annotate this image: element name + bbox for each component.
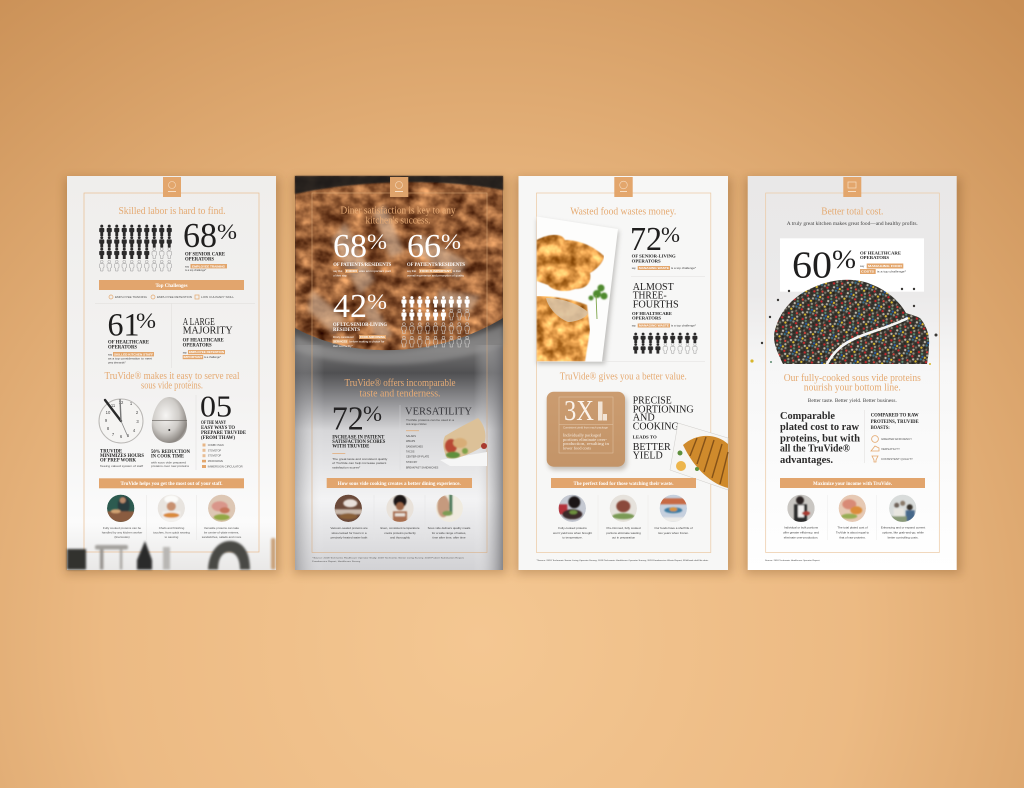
photo: kitchen utensils: [67, 538, 276, 570]
text: patient satisfaction: of TruVide can help increase patient: [332, 461, 387, 465]
photo: sealed packages: [659, 495, 687, 522]
list: preparation methods: STOVETOP: [208, 449, 222, 452]
photo: wrap on plate: [440, 418, 487, 466]
challenge list: EMPLOYEE TRAINING: [115, 295, 147, 299]
text: senior-living operators: [632, 254, 696, 270]
heading: taste and tenderness: [344, 377, 456, 400]
heading: taste and tenderness: taste and tenderness.: [360, 388, 441, 400]
photo: prepping protein: [107, 495, 135, 522]
package: 3x box: [547, 392, 627, 470]
stat: 05 easy ways: 05: [200, 389, 232, 424]
text: patients residents left: [333, 263, 392, 277]
photo: diner eating: [386, 495, 414, 522]
text: managing food costs: MANAGING FOOD: [868, 264, 902, 268]
package: 3x box: 3X: [564, 395, 594, 427]
text: senior care operators: OF SENIOR CARE: [185, 252, 225, 258]
text: staff benefits: Fully cooked proteins can be: [103, 526, 141, 530]
text: patient satisfaction: The great taste and consistent quality: [332, 457, 388, 461]
photo: diner with salad: [436, 494, 463, 522]
photo: sous vide bath: [334, 495, 362, 522]
text: minimizes prep work: TRUVIDE: [100, 450, 122, 455]
icon: clock: 9: [105, 418, 108, 423]
statement: comparable plated cost: Comparable: [780, 410, 835, 422]
text: dining benefits: Sous vide delivers quality meals: [428, 526, 471, 530]
stat: 68 percent: %: [217, 219, 237, 244]
photo: chef plating: [158, 495, 185, 522]
text: minimizes prep work: [100, 450, 144, 468]
photo: chef portioning: [787, 495, 815, 522]
block: versatility: TruVide proteins can be used in a: [406, 418, 455, 422]
stat: 05 easy ways: EASY WAYS TO: [201, 426, 235, 431]
callout: white stat box: [780, 238, 924, 292]
statement: comparable plated cost: [780, 410, 860, 466]
text: senior care operators: OPERATORS: [185, 258, 214, 262]
text: managing food costs: say: [860, 265, 865, 268]
heading: wasted food: Wasted food wastes money.: [570, 206, 676, 217]
stat: a large majority: say: [183, 352, 187, 354]
banner: better dining experience: [327, 478, 472, 488]
text: staff benefits: Chefs and finishing: [159, 526, 185, 530]
pictogram: 42 percent: [400, 296, 471, 348]
package: 3x box: Consistent yield from each package: [563, 426, 609, 430]
panel: better total cost: [745, 176, 961, 574]
package: 3x box: portions eliminate over-: [563, 437, 608, 442]
text: minimizes prep work: freeing valued system of staff: [100, 464, 143, 468]
package: 3x box: lower food costs: [563, 445, 591, 450]
stat: precise portioning: PRECISE: [633, 394, 672, 406]
text: staff benefits: touches, from quick searing: [153, 530, 190, 534]
text: senior care operators: say: [185, 265, 190, 268]
text: managing food costs: is a top challenge*: [877, 270, 906, 274]
text: patient satisfaction: WITH TRUVIDE: [332, 444, 369, 450]
icon: badge tab: [843, 177, 861, 197]
stat: 42 percent: [333, 288, 387, 325]
statement: comparable plated cost: advantages.: [780, 454, 833, 466]
text: minimizes prep work: MINIMIZES HOURS: [100, 454, 144, 459]
banner: get the most out of staff: TruVide helps you get the most out of your staff.: [120, 482, 223, 487]
text: patients residents left: OF PATIENTS/RESIDENTS: [333, 263, 392, 268]
list: advantages with icons: [871, 436, 913, 462]
challenge list: LOW CULINARY SKILL: [201, 295, 235, 299]
text: income benefits: offer greater efficiency, and: [783, 530, 819, 534]
footnote: [312, 556, 465, 563]
text: patients residents right: overall experience and perception of quality: [407, 273, 465, 277]
text: patient satisfaction: INCREASE IN PATIENT: [332, 435, 385, 440]
block: versatility: SANDWICHES: [406, 445, 423, 448]
statement: comparable plated cost: plated cost to raw: [780, 421, 859, 433]
stat: 60 percent: [792, 244, 856, 286]
stat: precise portioning: [633, 394, 694, 462]
text: healthcare operators 61: SKILLED KITCHEN STAFF: [114, 352, 153, 356]
photo: team in meeting: [889, 495, 916, 522]
text: waste benefits: won't yield loss when brought: [553, 531, 592, 535]
challenge list: [109, 295, 235, 299]
heading: nourish your bottom line: nourish your bottom line.: [804, 382, 901, 394]
text: patients residents left: of their stay: [333, 273, 347, 277]
text: healthcare operators 61: prep demands*: [108, 360, 126, 364]
text: LTC senior-living residents: [332, 323, 387, 348]
text: dining benefits: slow-cooked for hours in a: [331, 531, 367, 535]
icon: clock: 3: [136, 419, 139, 424]
stat: precise portioning: PORTIONING: [633, 403, 694, 415]
stat: 68 percent: 68: [183, 216, 217, 255]
heading: diner satisfaction: [340, 204, 456, 226]
text: healthcare operators: is a top challenge*: [671, 324, 696, 328]
footnote: *Source: 2018 Technomic Senior Living Operator Survey; 2018 Technomic Healthcare Operator Survey; 2018 Foodservice Waste Report; FDA food shelf life data.: [536, 559, 709, 562]
photo: diner at table: [558, 495, 586, 522]
list: advantages with icons: CONSISTENT QUALITY: [881, 458, 913, 461]
text: compared to raw proteins: COMPARED TO RAW: [871, 414, 919, 419]
banner: watching waste: [551, 478, 696, 488]
banner: get the most out of staff: [99, 478, 244, 488]
text: compared to raw proteins: [871, 414, 919, 431]
text: dining benefits: for a wide range of tastes,: [432, 531, 466, 535]
text: senior care operators: [185, 252, 227, 272]
list: advantages with icons: GREATER EFFICIENCY: [881, 438, 912, 441]
text: patients residents left: was an important part: [359, 269, 391, 273]
text: healthcare operators: OPERATORS: [632, 315, 661, 320]
text: healthcare operators 61: as a top consideration to meet: [108, 356, 152, 360]
stat: 68 percent: [183, 216, 237, 255]
text: LTC senior-living residents: SERVICES: [333, 340, 348, 344]
banner: maximize income: [780, 478, 925, 488]
text: LTC senior-living residents: Firmly considered: [333, 335, 354, 339]
stat: a large majority: EMPLOYEE RETENTION: [189, 351, 224, 354]
list: advantages with icons: VERSATILITY: [881, 448, 900, 451]
stat: 61 percent: 61: [108, 308, 140, 344]
panel: wasted food: [516, 176, 732, 574]
text: cook time reduction: proteins over raw proteins: [151, 464, 190, 468]
heading: diner satisfaction: Diner satisfaction is key to any: [340, 204, 456, 216]
list: preparation methods: COMBI OVEN: [208, 444, 224, 447]
text: LTC senior-living residents: their next facility*: [333, 344, 353, 348]
icon: badge tab: [390, 177, 408, 197]
footnote: Source: 2018 Technomic Healthcare Operator Report.: [765, 559, 821, 562]
text: dining benefits: cooks proteins perfectly: [384, 531, 416, 535]
text: LTC senior-living residents: before making a choice for: [350, 340, 385, 344]
stat: a large majority: A LARGE: [183, 317, 215, 328]
stat: almost three-fourths: FOURTHS: [633, 298, 679, 310]
text: healthcare operators 61: [108, 340, 154, 364]
pictogram: three-fourths: [632, 332, 699, 354]
text: staff benefits: [102, 526, 242, 539]
text: income benefits: Enhancing and or expand current: [881, 526, 925, 530]
text: income benefits: TruVide is about equal to: [836, 530, 869, 534]
text: managing food costs: OF HEALTHCARE: [860, 250, 901, 256]
text: patient satisfaction: SATISFACTION SCORES: [332, 440, 386, 445]
text: waste benefits: to temperature.: [562, 536, 583, 540]
photo: versatile proteins: [208, 495, 235, 522]
stat: a large majority: is a challenge*: [204, 355, 221, 359]
icon: badge tab: [614, 177, 633, 197]
text: senior-living operators: say: [632, 267, 636, 270]
stat: 68 percent of patients: 68: [333, 228, 367, 265]
subheading: A truly great kitchen makes great food—and healthy profits.: [787, 222, 918, 227]
stat: almost three-fourths: [633, 281, 679, 310]
text: patients residents right: OF PATIENTS/RESIDENTS: [407, 263, 465, 268]
text: patients residents left: FOOD: [346, 270, 357, 273]
text: waste benefits: two years when frozen.: [658, 531, 689, 535]
photo: food spread: [839, 495, 866, 522]
stat: 05 easy ways: PREPARE TRUVIDE: [201, 431, 247, 436]
block: versatility: SALADS: [406, 435, 416, 438]
banner: top challenges: [99, 280, 244, 290]
list: preparation methods: MICROWAVE: [208, 460, 223, 463]
statement: comparable plated cost: proteins, but with: [780, 432, 860, 444]
stat: 05 easy ways: (FROM THAW): [201, 436, 235, 441]
stat: 68 percent of patients: [333, 228, 387, 265]
text: dining benefits: precisely heated water bath: [331, 536, 368, 540]
heading: better value: TruVide® gives you a better value.: [560, 370, 687, 382]
panel: diner satisfaction: [293, 176, 507, 574]
text: managing food costs: [860, 250, 906, 274]
heading: truvide makes it easy: TruVide® makes it easy to serve real: [104, 370, 240, 382]
icon: badge tab: [163, 177, 181, 197]
stat: a large majority: IMPORTANT: [184, 356, 203, 359]
stat: 72 percent increase: 72: [332, 400, 364, 437]
text: managing food costs: OPERATORS: [860, 255, 889, 260]
banner: better dining experience: How sous vide cooking creates a better dining experience.: [338, 482, 462, 487]
stat: almost three-fourths: THREE-: [633, 290, 667, 302]
stat: precise portioning: YIELD: [633, 450, 663, 462]
text: LTC senior-living residents: OF LTC/SENIOR-LIVING: [333, 323, 387, 328]
footnote: *Source: 2018 Technomic Healthcare Operator Study; 2018 Technomic Senior Living Survey; 2018 Patient Satisfaction Report.: [312, 556, 465, 560]
text: income benefits: that of raw proteins.: [839, 536, 866, 540]
text: patients residents right: FOOD IS IMPORTANT: [420, 270, 452, 273]
illustration: crowd forming cracked coffee-bean shape: [750, 272, 938, 366]
text: patient satisfaction: satisfaction scores*: [332, 465, 361, 469]
panel: skilled labor: [65, 176, 280, 574]
stat: 61 percent: %: [136, 308, 156, 333]
block: versatility: wide range of dishes:: [406, 422, 427, 426]
stat: 72 percent senior living: 72: [630, 221, 662, 258]
text: waste benefits: [553, 526, 693, 540]
stat: almost three-fourths: ALMOST: [633, 281, 674, 293]
stat: a large majority: OPERATORS: [183, 344, 212, 349]
stat: 66 percent of patients: 66: [407, 228, 441, 265]
heading: skilled labor: Skilled labor is hard to find.: [118, 206, 226, 217]
icon: clock: 12: [119, 400, 124, 405]
text: waste benefits: Pre-trimmed, fully cooked: [606, 526, 641, 530]
photo: plated chicken: [537, 216, 619, 364]
subheading: Better taste. Better yield. Better business.: [808, 399, 897, 404]
stat: 72 percent increase: [332, 400, 382, 437]
stat: 66 percent of patients: %: [441, 229, 461, 254]
text: minimizes prep work: OF PREP WORK: [100, 459, 136, 464]
stat: 42 percent: %: [367, 289, 387, 314]
icon: clock: 5: [127, 433, 130, 438]
text: healthcare operators 61: OF HEALTHCARE: [108, 340, 149, 346]
photo: plated protein: [610, 495, 637, 522]
package: 3x box: Individually packaged: [563, 433, 602, 438]
text: cook time reduction: [151, 450, 191, 468]
text: income benefits: The total plated cost of: [837, 526, 868, 530]
icon: clock: 1: [130, 401, 133, 406]
icon: clock: 2: [136, 410, 139, 415]
package: 3x box: production, resulting in: [563, 441, 610, 447]
text: dining benefits: [330, 526, 471, 540]
text: patients residents left: say that: [333, 269, 343, 273]
challenge list: EMPLOYEE RETENTION: [157, 295, 192, 299]
stat: 66 percent of patients: [407, 228, 461, 265]
text: staff benefits: be center-of-plate entrees,: [204, 530, 239, 534]
stat: precise portioning: COOKING: [633, 420, 679, 432]
text: staff benefits: Versatile proteins can take: [204, 526, 239, 530]
text: waste benefits: Fully-cooked proteins: [558, 526, 587, 530]
stat: precise portioning: BETTER: [633, 441, 671, 453]
icon: clock: 6: [120, 434, 123, 439]
stat: 60 percent: 60: [792, 244, 832, 286]
text: dining benefits: and thoroughly: [390, 536, 410, 540]
text: LTC senior-living residents: FOOD AND DINING: [360, 336, 385, 339]
stat: 72 percent increase: %: [363, 401, 382, 426]
text: income benefits: eliminate over-production.: [784, 536, 818, 540]
banner: watching waste: The perfect food for those watching their waste.: [574, 482, 674, 487]
text: healthcare operators: MANAGING WASTE: [639, 324, 669, 328]
text: healthcare operators 61: say: [108, 354, 113, 356]
stat: 72 percent senior living: [630, 221, 680, 258]
text: dining benefits: time after time, after time: [432, 536, 466, 540]
text: waste benefits: out in preparation: [612, 536, 636, 540]
text: patient satisfaction: [332, 435, 388, 469]
heading: better total cost: Better total cost.: [821, 206, 883, 217]
stat: 05 easy ways: [200, 389, 247, 441]
icon: clock: [99, 399, 143, 443]
text: senior-living operators: OF SENIOR-LIVING: [632, 254, 676, 259]
block: versatility: [405, 405, 472, 469]
icon: egg timer: [152, 397, 187, 443]
heading: truvide makes it easy: [104, 370, 240, 392]
text: patients residents right: say that: [407, 269, 416, 273]
text: LTC senior-living residents: RESIDENTS: [333, 328, 360, 333]
text: income benefits: Individual or bulk portions: [784, 526, 819, 530]
list: preparation methods: [202, 444, 243, 469]
text: compared to raw proteins: PROTEINS, TRUVIDE: [871, 420, 919, 425]
text: waste benefits: portions eliminate wasting: [606, 531, 641, 535]
text: cook time reduction: with sous vide prepared: [151, 460, 187, 464]
block: versatility: BREAKFAST SANDWICHES: [406, 466, 439, 469]
banner: top challenges: Top Challenges: [156, 284, 188, 289]
block: versatility: STIR FRY: [406, 461, 418, 464]
text: staff benefits: to saucing: [165, 535, 179, 539]
text: managing food costs: COSTS: [861, 270, 874, 274]
stat: 72 percent senior living: %: [661, 222, 680, 247]
text: staff benefits: (line/cooks): [114, 535, 130, 539]
text: patients residents right: [407, 263, 465, 277]
icon: clock: 7: [112, 432, 115, 437]
text: senior-living operators: OPERATORS: [632, 258, 661, 263]
text: healthcare operators: say: [632, 324, 636, 328]
icon: clock: 11: [111, 403, 116, 408]
text: senior care operators: is a top challenge*: [185, 268, 206, 272]
icon: clock: 10: [106, 410, 111, 415]
text: cook time reduction: 50% REDUCTION: [151, 450, 191, 455]
stat: 61 percent: [108, 308, 156, 344]
text: income benefits: options, like grab-and-go, while: [882, 530, 924, 534]
text: healthcare operators 61: OPERATORS: [108, 346, 137, 350]
text: staff benefits: handled by any kitchen worker: [102, 530, 142, 534]
stat: 42 percent: 42: [333, 288, 367, 325]
stat: a large majority: [183, 317, 233, 359]
footnote: Foodservice Report, Healthcare Survey: [312, 560, 360, 563]
icon: clock: 8: [107, 426, 110, 431]
text: patients residents right: to their: [453, 269, 461, 273]
stat: precise portioning: AND: [633, 412, 655, 424]
statement: comparable plated cost: all the TruVide®: [780, 443, 850, 455]
heading: truvide makes it easy: sous vide proteins.: [141, 380, 203, 392]
text: income benefits: better controlling costs.: [888, 536, 919, 540]
text: dining benefits: Vacuum-sealed proteins are: [330, 526, 368, 530]
banner: maximize income: Maximize your income with TruVide.: [813, 482, 893, 487]
block: versatility: WRAPS: [406, 440, 416, 443]
heading: diner satisfaction: kitchen's success.: [366, 214, 430, 226]
text: senior care operators: EMPLOYEE TRAINING: [192, 264, 225, 268]
photo: sliced chicken in pan: [295, 176, 503, 364]
photo: grilled chicken plate: [670, 423, 728, 490]
stat: 60 percent: %: [832, 245, 856, 274]
stat: a large majority: OF HEALTHCARE: [183, 339, 224, 344]
heading: nourish your bottom line: Our fully-cooked sous vide proteins: [784, 372, 921, 384]
text: compared to raw proteins: BOASTS:: [871, 426, 890, 431]
list: preparation methods: STOVETOP: [208, 455, 222, 458]
block: versatility: TACOS: [406, 450, 415, 453]
text: healthcare operators: [632, 311, 696, 328]
heading: nourish your bottom line: [784, 372, 921, 394]
list: preparation methods: IMMERSION CIRCULATOR: [208, 466, 243, 469]
icon: clock: 4: [133, 428, 136, 433]
text: senior-living operators: is a top challenge*: [671, 266, 696, 270]
text: dining benefits: Even, consistent temperature: [380, 526, 420, 530]
block: versatility: VERSATILITY: [405, 405, 472, 417]
block: versatility: CENTER-OF-PLATE: [406, 456, 429, 459]
stat: precise portioning: LEADS TO: [633, 434, 657, 439]
stat: 68 percent of patients: %: [367, 229, 387, 254]
pictogram: 68 percent: [98, 224, 173, 272]
heading: taste and tenderness: TruVide® offers incomparable: [344, 377, 456, 389]
text: healthcare operators: OF HEALTHCARE: [632, 311, 672, 316]
text: income benefits: [783, 526, 925, 540]
text: cook time reduction: IN COOK TIME: [151, 454, 184, 460]
text: senior-living operators: MANAGING WASTE: [639, 267, 669, 270]
text: waste benefits: Our foods have a shelf life of: [654, 526, 693, 530]
stat: a large majority: MAJORITY: [183, 326, 233, 336]
text: staff benefits: sandwiches, salads and more: [202, 535, 242, 539]
stat: 05 easy ways: OF THE MANY: [201, 421, 226, 426]
